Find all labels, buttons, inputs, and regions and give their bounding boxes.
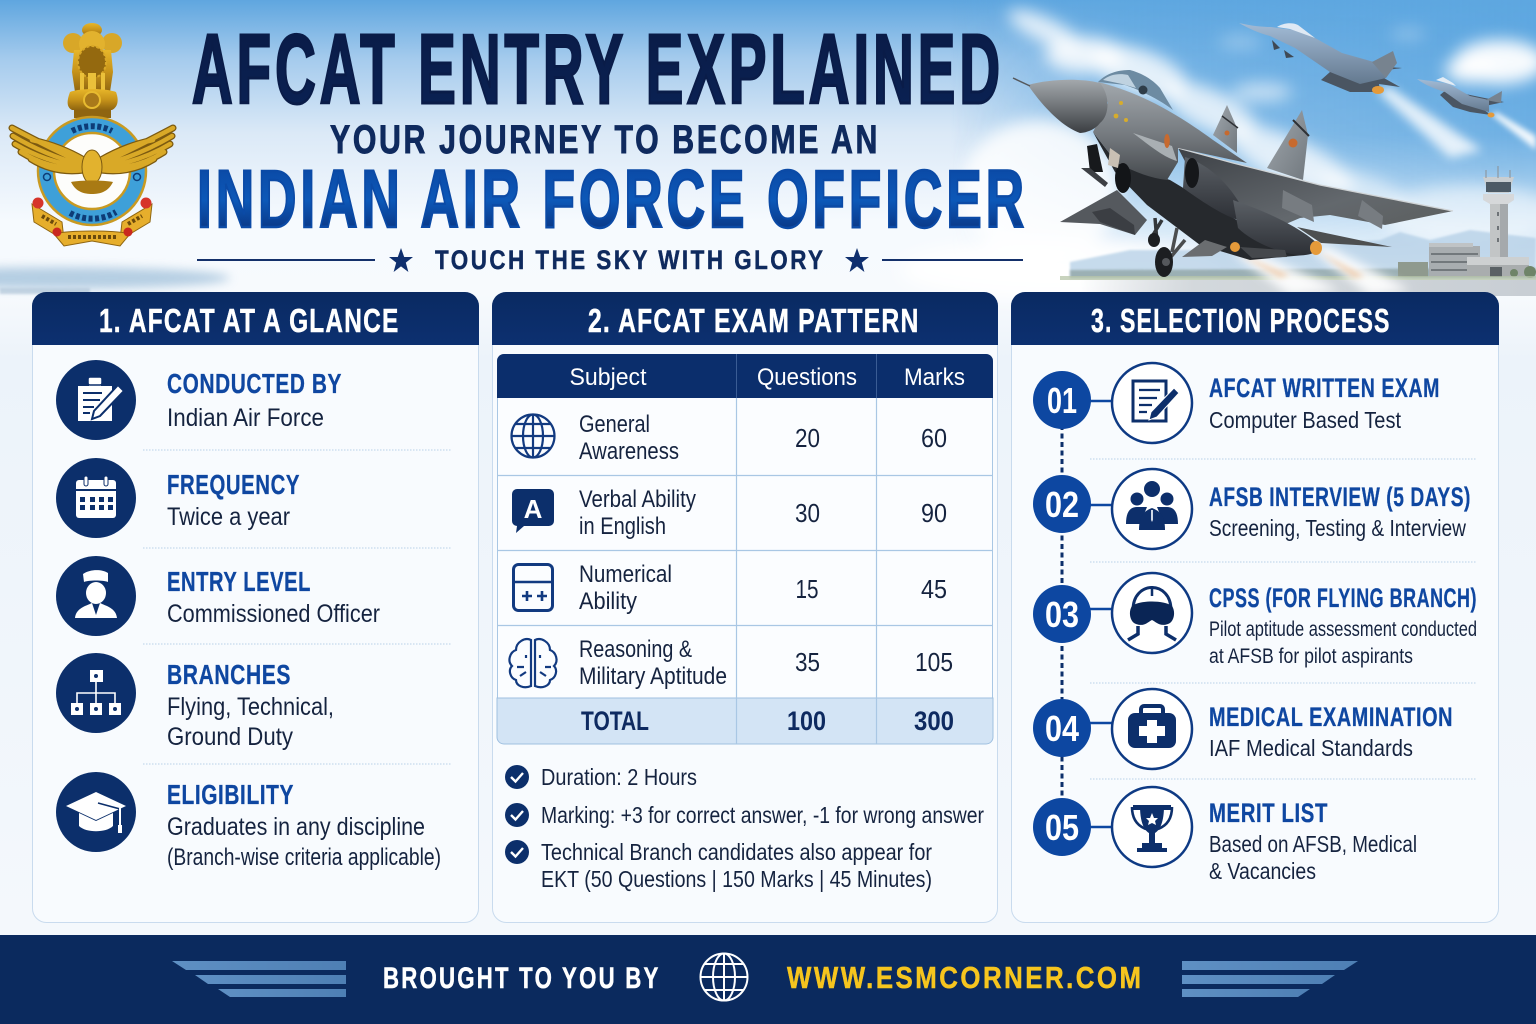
exam notes list: Technical Branch candidates also appear for: [541, 839, 932, 865]
row: verbal ability: 30: [795, 498, 820, 528]
subtitle: YOUR JOURNEY TO BECOME AN: [330, 118, 880, 162]
icon: terminal buildings: [1398, 243, 1536, 278]
panel: selection process: [1011, 292, 1499, 922]
row: total: TOTAL: [581, 706, 649, 736]
item: entry level: ENTRY LEVEL: [167, 566, 311, 597]
row: verbal ability: 90: [921, 498, 947, 528]
timeline dotted connector: [1060, 425, 1064, 805]
table header: Questions: [757, 364, 857, 391]
row: total: [581, 706, 954, 736]
step 01: Computer Based Test: [1209, 407, 1401, 433]
emblem: Indian Air Force crest: [12, 23, 173, 246]
panel: AFCAT exam pattern: [492, 292, 998, 922]
row: total: 100: [787, 706, 826, 736]
step 01: 01: [1047, 380, 1077, 421]
exam notes list: EKT (50 Questions | 150 Marks | 45 Minutes): [541, 866, 932, 892]
row: numerical ability: 15: [796, 574, 818, 604]
row: numerical ability: 45: [921, 574, 947, 604]
step 04: MEDICAL EXAMINATION: [1209, 702, 1453, 732]
footer bar: [0, 935, 1536, 1024]
item: eligibility: ELIGIBILITY: [167, 779, 294, 810]
footer website: WWW.ESMCORNER.COM: [787, 960, 1144, 995]
step 04: 04: [1045, 708, 1079, 749]
item: entry level: [56, 556, 380, 636]
row: general awareness: 20: [795, 423, 820, 453]
row: reasoning and military aptitude: [509, 636, 953, 690]
row: general awareness: [512, 411, 947, 465]
row: reasoning and military aptitude: 105: [915, 647, 953, 677]
tagline with stars: TOUCH THE SKY WITH GLORY: [435, 245, 826, 275]
item: conducted by: Indian Air Force: [167, 404, 324, 432]
row: numerical ability: Ability: [579, 588, 637, 615]
panel heading: 2. AFCAT EXAM PATTERN: [588, 302, 920, 339]
step 01: AFCAT WRITTEN EXAM: [1209, 373, 1440, 403]
exam notes list: [505, 764, 984, 892]
hills, tower and airfield buildings: [1060, 166, 1536, 296]
step 05: [1033, 787, 1417, 884]
footer label: BROUGHT TO YOU BY: [383, 962, 660, 995]
panel heading: 3. SELECTION PROCESS: [1091, 302, 1390, 339]
icon: control tower: [1483, 166, 1514, 258]
row: general awareness: General: [579, 411, 650, 438]
item: branches: BRANCHES: [167, 659, 291, 690]
icon: footer globe: [700, 954, 748, 1000]
jet trail smoke: [1232, 86, 1536, 296]
icon: small jet near: [1239, 23, 1402, 94]
row: reasoning and military aptitude: 35: [795, 647, 820, 677]
step 02: Screening, Testing & Interview: [1209, 515, 1467, 541]
row: verbal ability: [512, 486, 947, 540]
item: frequency: Twice a year: [167, 503, 290, 531]
icon: left wing stripes: [172, 961, 346, 997]
roundel: [38, 117, 146, 225]
table header: Marks: [904, 364, 965, 391]
icon: small jet far: [1417, 77, 1504, 118]
table header: Subject: [570, 364, 647, 391]
item: conducted by: CONDUCTED BY: [167, 368, 342, 399]
step 01: [1033, 363, 1440, 443]
ribbon: [32, 198, 152, 246]
table: subject marks: [497, 354, 993, 744]
step 02: [1033, 469, 1471, 549]
icon: right wing stripes: [1182, 961, 1358, 997]
step 04: IAF Medical Standards: [1209, 735, 1413, 761]
item: entry level: Commissioned Officer: [167, 600, 380, 628]
step 02: 02: [1045, 484, 1079, 525]
item: branches: Flying, Technical,: [167, 693, 334, 721]
step 05: 05: [1045, 807, 1079, 848]
lion capital: [63, 23, 122, 118]
item: eligibility: (Branch-wise criteria applicable): [167, 844, 441, 871]
item: eligibility: Graduates in any discipline: [167, 813, 425, 841]
eagle: [12, 128, 173, 194]
row: general awareness: 60: [921, 423, 947, 453]
item: branches: Ground Duty: [167, 723, 293, 751]
step 05: Based on AFSB, Medical: [1209, 831, 1417, 857]
item: branches: [56, 653, 334, 751]
item: eligibility: [56, 772, 441, 871]
step 05: & Vacancies: [1209, 858, 1316, 884]
row: general awareness: Awareness: [579, 438, 679, 465]
step 05: MERIT LIST: [1209, 798, 1328, 828]
row: numerical ability: [514, 561, 947, 615]
row: total: 300: [914, 706, 954, 736]
step 04: [1033, 689, 1453, 769]
panel: AFCAT at a glance: [32, 292, 479, 922]
exam notes list: Duration: 2 Hours: [541, 764, 697, 790]
heading: Indian Air Force Officer: INDIAN AIR FORCE OFFICER: [197, 154, 1028, 245]
row: reasoning and military aptitude: Military Aptitude: [579, 663, 727, 690]
icon: main fighter jet: [1013, 70, 1453, 277]
clouds: [900, 2, 1536, 300]
step 03: 03: [1045, 594, 1079, 635]
step 03: [1033, 573, 1477, 668]
row: verbal ability: Verbal Ability: [579, 486, 696, 513]
panel heading: 1. AFCAT AT A GLANCE: [99, 302, 400, 339]
row: verbal ability: in English: [579, 513, 666, 540]
item: conducted by: [56, 360, 342, 440]
tagline with stars: [197, 245, 1023, 275]
table header: [570, 364, 965, 391]
row: reasoning and military aptitude: Reasoning &: [579, 636, 692, 663]
item: frequency: FREQUENCY: [167, 469, 300, 500]
step 03: at AFSB for pilot aspirants: [1209, 645, 1413, 668]
row: numerical ability: Numerical: [579, 561, 672, 588]
item: frequency: [56, 458, 300, 538]
row: verbal ability: A: [524, 494, 543, 524]
exam notes list: Marking: +3 for correct answer, -1 for wrong answer: [541, 802, 984, 828]
